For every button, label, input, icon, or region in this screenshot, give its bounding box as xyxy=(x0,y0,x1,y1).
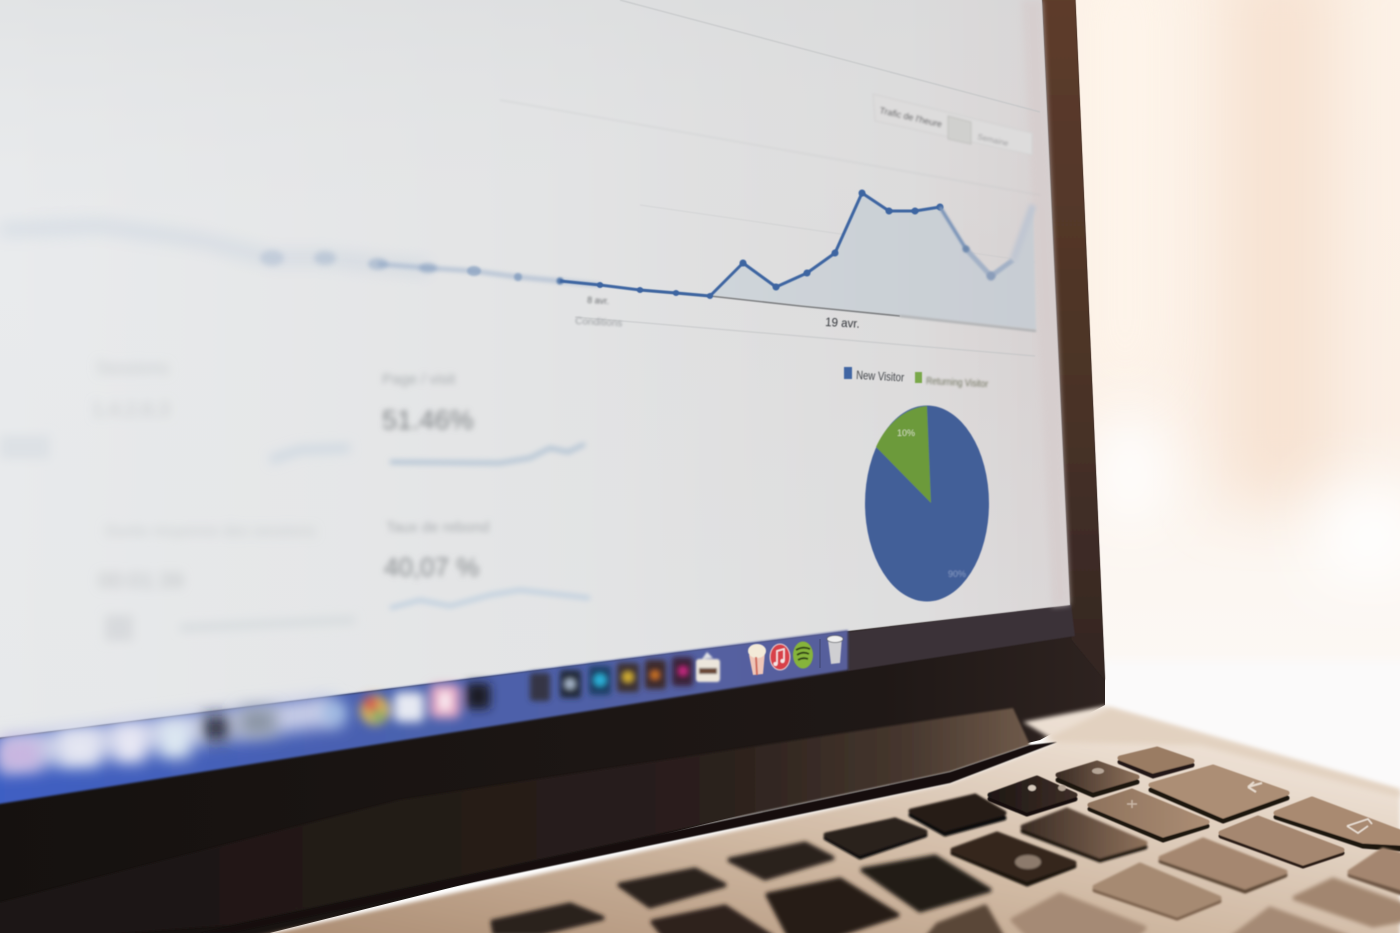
keys: row 1 xyxy=(990,749,1192,814)
axis sublabel: Conditions xyxy=(575,316,623,329)
time range selector xyxy=(873,94,1032,155)
dock icon: Spotify xyxy=(793,642,813,668)
blurred KPI: bottom left: Durée moyenne des sessions xyxy=(105,523,316,540)
keys: row 1 far left xyxy=(493,844,832,933)
fading right line xyxy=(940,207,966,249)
legend xyxy=(844,367,989,390)
chart grid lines xyxy=(500,0,1040,356)
keys: row 2 xyxy=(1023,767,1400,866)
selector box xyxy=(873,94,1032,155)
dock icon: popcorn xyxy=(748,644,766,675)
keys: bottom rows, most blurred xyxy=(653,857,1400,933)
blurred middle line xyxy=(378,264,600,285)
legend: Returning Visitor xyxy=(926,375,989,390)
blurred KPI: top left xyxy=(0,358,350,460)
dock bar xyxy=(0,630,848,807)
sharp data points xyxy=(597,190,944,299)
background: blurred window light xyxy=(1060,0,1400,933)
chart axis fading xyxy=(900,316,1036,331)
keys: lower rows, out of focus xyxy=(953,834,1400,918)
blurred KPI: top left: Sessions xyxy=(96,358,169,378)
key: fn dark xyxy=(990,778,1075,814)
keyboard deck xyxy=(228,706,1400,933)
pie chart xyxy=(865,406,989,602)
pie label: 90%: 90% xyxy=(948,569,966,579)
blurred KPI: top right: 51.46% xyxy=(382,405,474,435)
pie label: 10%: 10% xyxy=(897,428,915,438)
key: row 3 second xyxy=(1221,818,1342,866)
blurred far-left line xyxy=(0,226,428,268)
line chart: visits xyxy=(0,190,1036,331)
legend: new visitor xyxy=(844,367,852,379)
blurred KPI: bottom left xyxy=(98,523,355,641)
selected button xyxy=(948,116,971,144)
dock xyxy=(0,630,848,807)
dock divider xyxy=(819,639,821,668)
keys: row 1 blurred xyxy=(826,796,1004,857)
key: far right function xyxy=(1120,749,1192,776)
blurred KPI: bottom left: 00:01:39 xyxy=(98,568,184,593)
key: equals xyxy=(1023,810,1145,860)
selector label: Trafic de l'heure xyxy=(879,105,943,129)
dock icon: trash xyxy=(827,636,843,664)
dock pale left glow xyxy=(0,695,340,772)
blurred KPI: top left: 1,4,2,6,3 xyxy=(92,399,170,421)
key: plus xyxy=(1090,791,1207,840)
legend: New Visitor xyxy=(856,368,905,385)
sharp line xyxy=(560,193,940,296)
dock icon: toolbox xyxy=(696,652,720,682)
data points left xyxy=(260,250,564,284)
chart area fill xyxy=(710,193,1036,330)
key: shift xyxy=(1276,799,1400,849)
blurred KPI: bottom right: 40,07 % xyxy=(384,552,479,582)
chart axis xyxy=(640,290,900,316)
legend: returning visitor xyxy=(915,372,922,383)
blurred KPI: bottom right xyxy=(384,519,590,608)
key: return xyxy=(1151,767,1287,821)
pie slice: returning 10% xyxy=(876,406,931,503)
hinge strip xyxy=(0,708,1057,933)
blurred KPI: top right: Page / visit xyxy=(382,371,456,388)
dock icons: app squares xyxy=(530,657,693,701)
screen xyxy=(0,0,1070,740)
laptop lid bezel xyxy=(0,0,1105,933)
axis label: 8 avr.: 8 avr. xyxy=(587,295,609,306)
blurred KPI: top right xyxy=(382,371,585,463)
dock icon: iTunes xyxy=(770,644,790,670)
key: volume xyxy=(1058,763,1137,795)
selector options: Semaine xyxy=(977,132,1010,148)
axis label: 19 avr.: 19 avr. xyxy=(825,317,860,331)
dock icons: blurred left xyxy=(0,701,347,770)
blurred KPI: bottom right: Taux de rebond xyxy=(386,519,489,536)
